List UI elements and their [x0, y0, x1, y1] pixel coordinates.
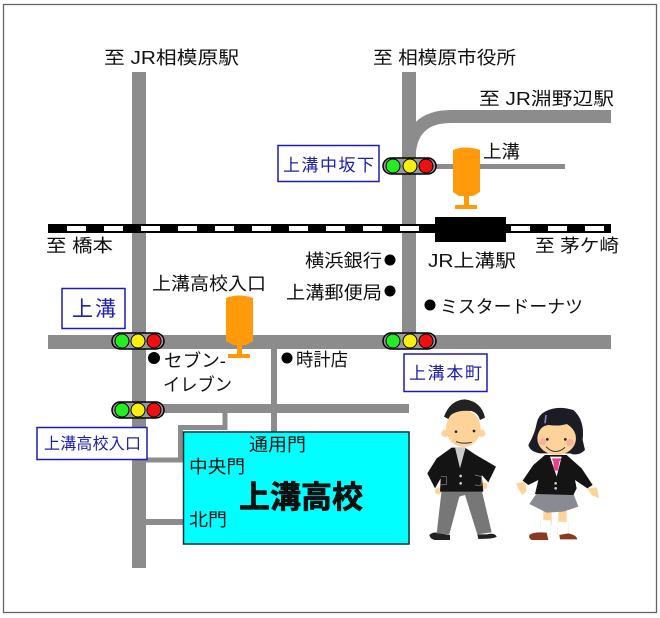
- label: Kamimizo high school entrance bus stop: 上溝高校入口: [152, 274, 266, 294]
- bus stop sign: Kamimizo: [453, 148, 480, 209]
- landmark: Seven-Eleven: セブン-: [164, 350, 226, 371]
- traffic light: Kamimizo high school entrance: [112, 402, 164, 418]
- school name: 上溝高校: [239, 480, 363, 515]
- traffic light: Kamimizo Honmachi: [383, 333, 436, 349]
- landmark: Seven-Eleven: イレブン: [163, 374, 232, 395]
- label: JR Kamimizo station: JR上溝駅: [428, 251, 516, 271]
- intersection label: Kamimizo: [62, 288, 125, 328]
- direction: Chigasaki: 至 茅ケ崎: [535, 236, 619, 256]
- intersection label: Kamimizo: 上溝: [72, 298, 116, 321]
- intersection label: Kamimizo Nakasakashita: [278, 146, 379, 182]
- direction: Hashimoto: 至 橋本: [46, 236, 113, 256]
- school building: [184, 432, 409, 544]
- intersection label: Kamimizo high school entrance: 上溝高校入口: [44, 435, 141, 453]
- illustration: boy student in uniform: [427, 399, 497, 540]
- landmark: Yokohama Bank: 横浜銀行: [305, 251, 382, 271]
- railway line: [48, 224, 611, 233]
- gate: main gate: 中央門: [189, 457, 245, 477]
- bus stop sign: Kamimizo high school entrance: [226, 296, 253, 358]
- gate: service gate: 通用門: [249, 435, 306, 455]
- landmark: watch shop: 時計店: [296, 350, 348, 370]
- landmark: Mister Donut: ミスタードーナツ: [440, 297, 583, 317]
- direction: JR Fuchinobe station: 至 JR淵野辺駅: [479, 89, 614, 109]
- direction: Sagamihara city hall: 至 相模原市役所: [373, 48, 516, 68]
- intersection label: Kamimizo Honmachi: 上溝本町: [409, 364, 482, 383]
- intersection label: Kamimizo Honmachi: [404, 354, 487, 392]
- intersection label: Kamimizo Nakasakashita: 上溝中坂下: [283, 156, 374, 175]
- traffic light: Kamimizo Nakasakashita: [383, 158, 436, 174]
- landmark: Seven-Eleven: [148, 350, 232, 395]
- intersection label: Kamimizo high school entrance: [37, 428, 147, 460]
- label: Kamimizo bus stop: 上溝: [483, 142, 520, 162]
- illustration: girl student in uniform: [516, 408, 599, 540]
- traffic light: Kamimizo: [112, 333, 164, 349]
- JR Kamimizo station: [435, 217, 506, 242]
- direction: JR Sagamihara station: 至 JR相模原駅: [104, 48, 239, 68]
- gate: north gate: 北門: [189, 510, 227, 530]
- landmark: Kamimizo post office: 上溝郵便局: [286, 283, 382, 303]
- road network: [48, 72, 611, 568]
